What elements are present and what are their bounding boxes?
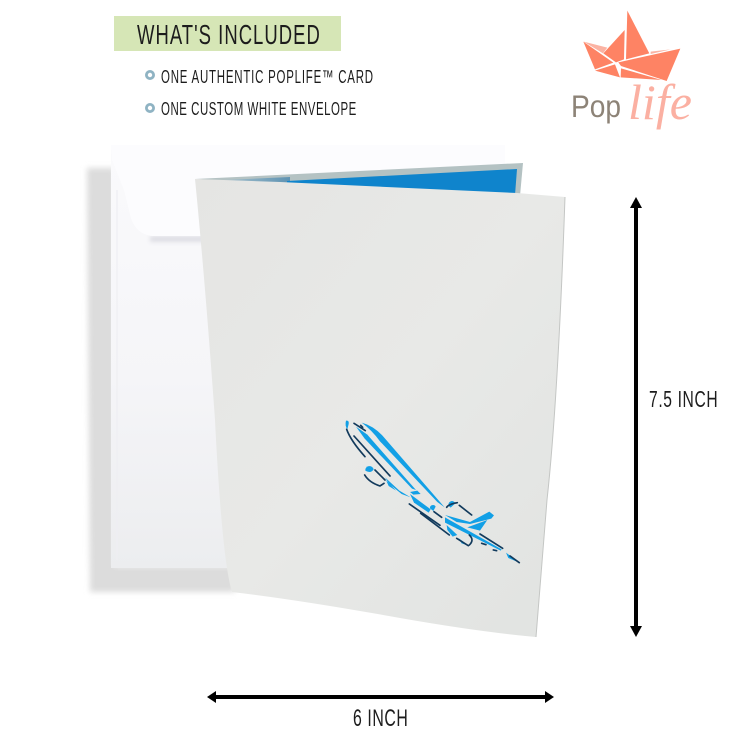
- card back panel: [195, 163, 523, 196]
- blue interior: [287, 169, 517, 195]
- envelope shadow: [87, 168, 235, 592]
- card front: [195, 179, 565, 637]
- list of included items: [146, 67, 373, 120]
- card right edge shading: [536, 197, 565, 637]
- envelope flap: [111, 145, 505, 236]
- plane cut-out: [346, 421, 519, 563]
- envelope: [87, 145, 505, 592]
- dimension label: 6 inch: 6 INCH: [353, 706, 408, 732]
- inner shaded strip: [225, 177, 290, 183]
- list item: envelope: ONE CUSTOM WHITE ENVELOPE: [161, 99, 356, 120]
- logo: Poplife: [571, 11, 692, 130]
- wordmark: life: life: [628, 74, 692, 130]
- list item: card: ONE AUTHENTIC POPLIFE™ CARD: [161, 67, 373, 88]
- wordmark: Pop: Pop: [571, 88, 621, 124]
- heading: what's included: WHAT'S INCLUDED: [137, 20, 320, 51]
- flap shadow: [150, 236, 205, 242]
- greeting card: [195, 163, 565, 637]
- dimension label: 7.5 inch: 7.5 INCH: [649, 387, 718, 413]
- icon: origami boat: [583, 11, 680, 81]
- envelope crease: [116, 190, 118, 560]
- plane dark outlines: [347, 423, 519, 563]
- envelope body: [111, 145, 505, 568]
- plane blue parts: [346, 421, 519, 563]
- dimension arrow: height: [630, 197, 642, 637]
- dimension arrow: width: [207, 691, 554, 703]
